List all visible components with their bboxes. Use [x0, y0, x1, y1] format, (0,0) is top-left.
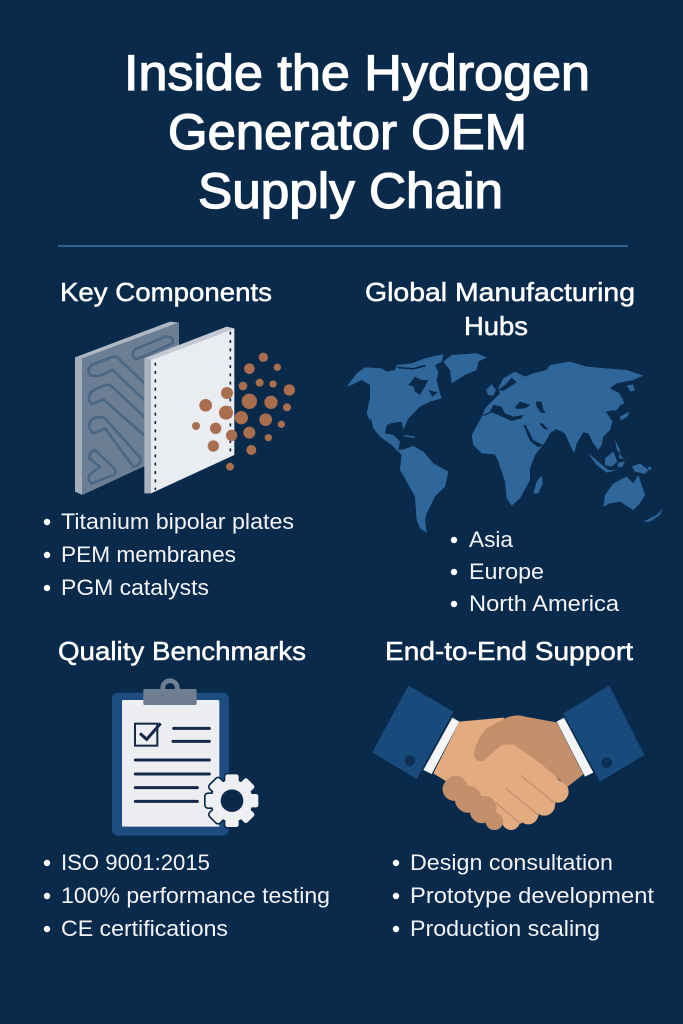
- panel: global manufacturing hubs: [347, 277, 663, 616]
- list: end-to-end support: [393, 850, 654, 941]
- heading: global manufacturing hubs: Hubs: [464, 311, 528, 341]
- title: Supply Chain: [198, 163, 503, 219]
- panel: key components: [44, 277, 295, 600]
- list: hubs: [451, 527, 620, 616]
- heading: global manufacturing hubs: Global Manufacturing: [365, 277, 635, 307]
- list: quality benchmarks: [44, 850, 330, 941]
- panel: quality benchmarks: [44, 636, 330, 941]
- heading: end-to-end support: End-to-End Support: [385, 636, 634, 666]
- list: key components: PEM membranes: [61, 542, 236, 567]
- title: Inside the Hydrogen: [124, 45, 590, 101]
- panel: end-to-end support: [372, 636, 654, 941]
- list: quality benchmarks: ISO 9001:2015: [61, 850, 210, 875]
- list: quality benchmarks: 100% performance testing: [61, 883, 330, 908]
- list: quality benchmarks: CE certifications: [61, 916, 228, 941]
- list: hubs: Europe: [469, 559, 544, 584]
- world map: [347, 353, 663, 533]
- list: end-to-end support: Design consultation: [410, 850, 613, 875]
- title: [124, 45, 590, 219]
- heading: key components: Key Components: [60, 277, 272, 307]
- list: end-to-end support: Production scaling: [410, 916, 600, 941]
- list: end-to-end support: Prototype development: [410, 883, 654, 908]
- icon: handshake: [372, 686, 644, 830]
- heading: quality benchmarks: Quality Benchmarks: [58, 636, 306, 666]
- list: hubs: North America: [469, 591, 620, 616]
- list: hubs: Asia: [469, 527, 514, 552]
- title: Generator OEM: [168, 104, 527, 160]
- list: key components: Titanium bipolar plates: [61, 509, 294, 534]
- icon: clipboard with checklist and gear: [112, 678, 258, 836]
- list: key components: PGM catalysts: [61, 575, 209, 600]
- heading: global manufacturing hubs: [365, 277, 635, 341]
- icon: bipolar plates, membrane and catalyst particles: [75, 322, 295, 495]
- list: key components: [44, 509, 294, 600]
